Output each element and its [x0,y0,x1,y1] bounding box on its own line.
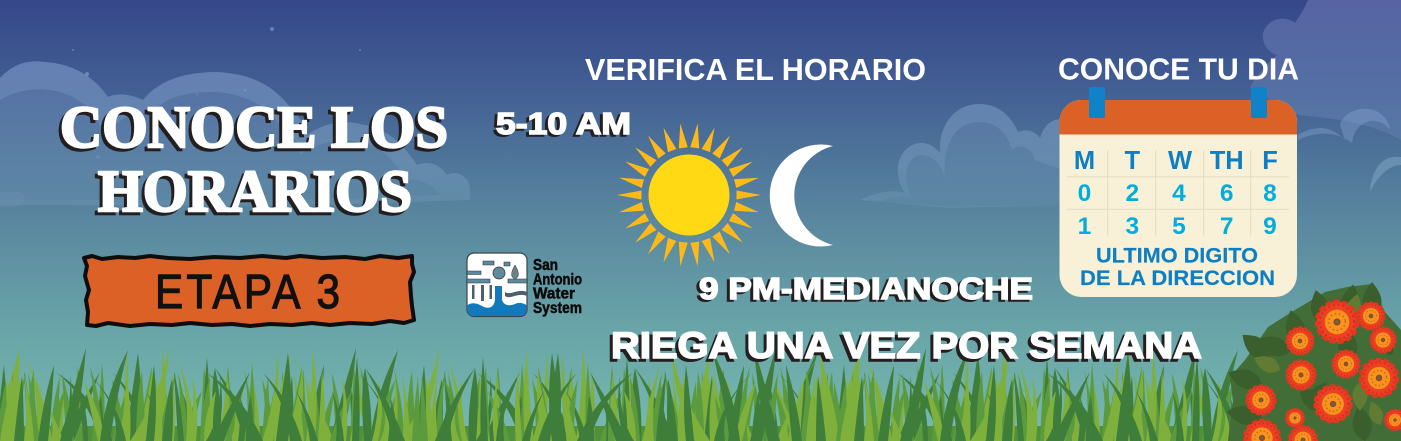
calendar header [1060,100,1297,134]
address digits: 2 [1125,180,1139,207]
address digits: 0 [1078,180,1091,207]
watering frequency: RIEGA UNA VEZ POR SEMANA [611,325,1202,366]
title: CONOCE LOS [60,94,448,160]
weekday labels: W [1168,147,1193,175]
weekday labels [1074,147,1278,175]
heading: know your day: CONOCE TU DIA [1058,52,1299,86]
address digits: 9 [1263,213,1277,240]
logo wordmark: San [533,257,558,274]
stage label: ETAPA 3 [155,264,340,319]
weekday labels: M [1074,147,1095,175]
calendar caption [1080,244,1275,290]
weekday labels: F [1262,147,1278,175]
cloud: upper right [1250,0,1401,192]
title [60,94,448,224]
night hours: 9 PM-MEDIANOCHE [699,271,1033,306]
address digits: 8 [1263,180,1277,207]
heading: check the schedule: VERIFICA EL HORARIO [585,52,926,87]
title: HORARIOS [98,158,412,224]
address digits: 3 [1125,213,1139,240]
calendar caption: DE LA DIRECCION [1080,266,1275,290]
logo wordmark: System [533,300,582,317]
icon: sun [617,123,761,267]
calendar rings [1089,87,1267,118]
icon: crescent moon [770,144,833,246]
logo mark [467,253,527,316]
calendar caption: ULTIMO DIGITO [1096,244,1258,268]
address digits: 7 [1220,213,1234,240]
stage badge [84,256,414,326]
grass [0,348,1401,441]
logo wordmark: Water [533,286,575,302]
address digits: 4 [1172,180,1186,207]
calendar grid [1067,150,1289,236]
calendar [1060,87,1297,297]
lantana bush [1225,282,1401,441]
weekday labels: T [1125,147,1141,175]
weekday labels: TH [1210,147,1244,175]
SAWS logo [467,253,582,317]
address digits [1078,180,1277,240]
address digits: 1 [1078,213,1091,240]
stars [72,27,361,159]
logo wordmark: Antonio [533,272,582,288]
address digits: 6 [1220,180,1234,207]
morning hours: 5-10 AM [496,106,631,141]
logo wordmark [533,257,582,317]
cloud: left [0,61,470,207]
address digits: 5 [1172,213,1186,240]
cloud: center right [860,104,1062,208]
